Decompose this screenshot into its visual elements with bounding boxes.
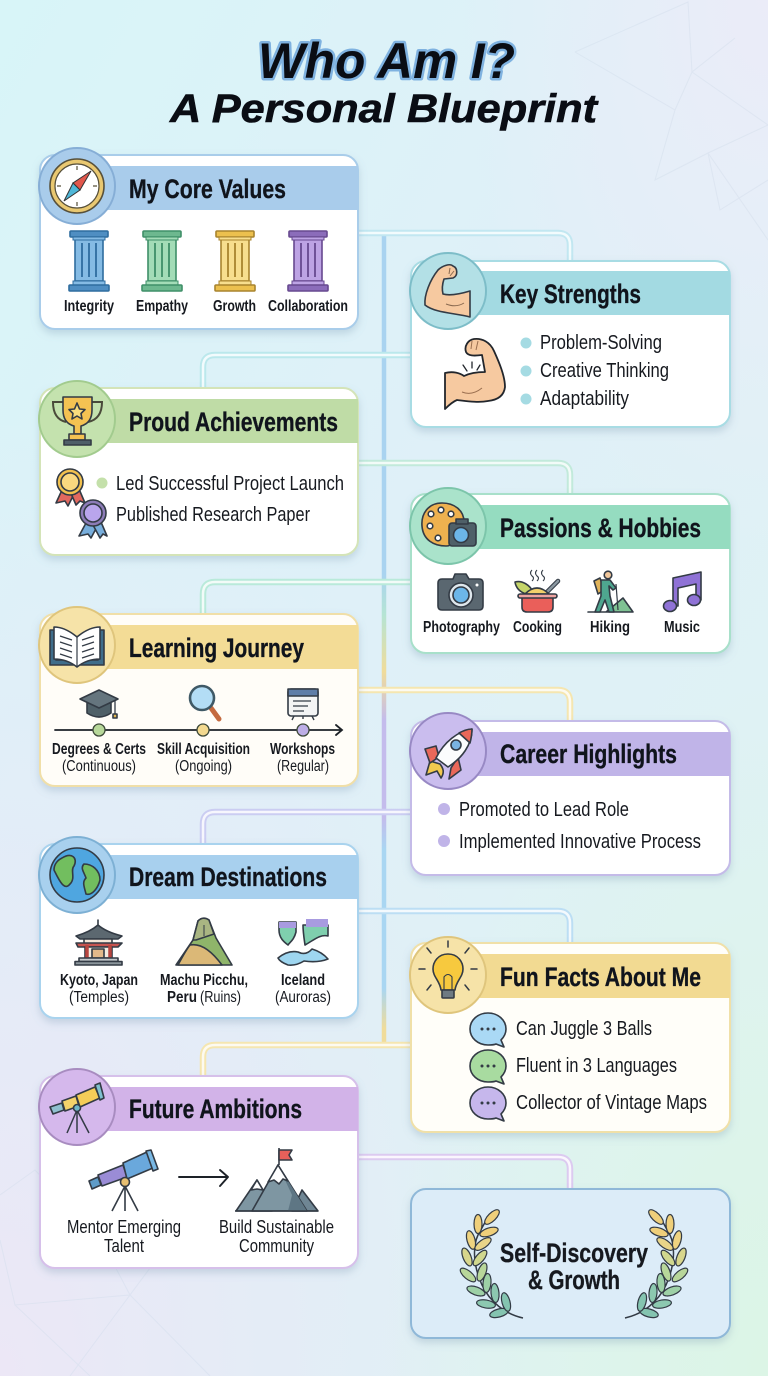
timeline labels: Skill Acquisition (157, 741, 250, 758)
timeline labels: Workshops (270, 741, 335, 758)
heading: Fun Facts About Me (500, 962, 701, 992)
icon: yellow pillar (215, 231, 255, 291)
icon: hiker (588, 571, 633, 612)
achievements list (96, 473, 344, 526)
value labels: Integrity (64, 298, 114, 315)
panel: dream destinations (39, 837, 358, 1018)
strengths list: Creative Thinking (540, 360, 669, 382)
destination labels: (Ruins) (200, 989, 241, 1006)
icon: bicep (445, 339, 505, 409)
heading: Passions & Hobbies (500, 513, 701, 543)
title (169, 33, 599, 131)
hobby labels: Photography (423, 619, 500, 636)
strengths list: Problem-Solving (540, 332, 662, 354)
icon: blue telescope (89, 1150, 158, 1211)
timeline labels: (Continuous) (62, 758, 136, 775)
career list: Implemented Innovative Process (459, 831, 701, 853)
panel: fun facts (410, 937, 730, 1132)
icon: cooking pot (515, 570, 558, 612)
timeline labels: (Regular) (277, 758, 329, 775)
connectors (203, 233, 570, 1190)
panel: career highlights (410, 713, 730, 875)
career list: Promoted to Lead Role (459, 799, 629, 821)
icon: camera (438, 574, 483, 610)
ambition labels: Community (239, 1236, 314, 1256)
heading: Learning Journey (129, 633, 304, 663)
icon: green pillar (142, 231, 182, 291)
facts list (516, 1018, 707, 1114)
facts list: Collector of Vintage Maps (516, 1092, 707, 1114)
closing message: & Growth (528, 1265, 620, 1295)
value labels: Collaboration (268, 298, 348, 315)
heading: Dream Destinations (129, 862, 327, 892)
destination labels: (Auroras) (275, 989, 331, 1006)
ambition labels (67, 1217, 334, 1256)
icon: palette and camera (410, 488, 486, 564)
ambition labels: Talent (104, 1236, 144, 1256)
timeline (55, 724, 342, 736)
hobby labels: Hiking (590, 619, 630, 636)
value labels (64, 298, 348, 315)
icon: right laurel (625, 1207, 690, 1319)
icon: medals (56, 469, 107, 538)
achievements list: Published Research Paper (116, 504, 310, 526)
icon: music note (664, 572, 701, 612)
closing message: Self-Discovery (500, 1238, 648, 1268)
panel: passions and hobbies (410, 488, 730, 653)
timeline labels: (Ongoing) (175, 758, 232, 775)
destination labels: Iceland (281, 972, 325, 989)
icon: kyoto temple (75, 920, 122, 965)
heading: My Core Values (129, 174, 286, 204)
icon: purple pillar (288, 231, 328, 291)
icon: light bulb (410, 937, 486, 1013)
destination labels: (Temples) (69, 989, 129, 1006)
icon: rocket (410, 713, 486, 789)
career list (438, 799, 701, 853)
icon: open book (39, 607, 115, 683)
value labels: Empathy (136, 298, 188, 315)
closing message (500, 1238, 648, 1295)
destination labels (60, 972, 331, 1006)
timeline labels: Degrees & Certs (52, 741, 146, 758)
destination labels: Peru (167, 989, 197, 1006)
panel: learning journey (39, 607, 358, 786)
icon: yellow telescope (39, 1069, 115, 1145)
strengths list (520, 332, 669, 410)
heading: Future Ambitions (129, 1094, 302, 1124)
heading: Key Strengths (500, 279, 641, 309)
arrow (179, 1170, 228, 1186)
icon: speech bubbles (470, 1013, 506, 1121)
icon: blue pillar (69, 231, 109, 291)
title: Who Am I? (258, 33, 515, 89)
value labels: Growth (213, 298, 256, 315)
ambition labels: Build Sustainable (219, 1217, 334, 1237)
achievements list: Led Successful Project Launch (116, 473, 344, 495)
panel: self-discovery (411, 1189, 730, 1338)
panel: future ambitions (39, 1069, 358, 1268)
panel: my core values (39, 148, 358, 329)
panel: key strengths (410, 253, 730, 427)
icon: workshop board (288, 689, 318, 720)
hobby labels (423, 619, 700, 636)
hobby labels: Cooking (513, 619, 562, 636)
heading: Proud Achievements (129, 407, 338, 437)
icon: flexed arm badge (410, 253, 486, 329)
strengths list: Adaptability (540, 388, 629, 410)
facts list: Can Juggle 3 Balls (516, 1018, 652, 1040)
icon: globe (39, 837, 115, 913)
icon: graduation cap (80, 690, 118, 718)
panel: proud achievements (39, 381, 358, 555)
destination labels: Kyoto, Japan (60, 972, 138, 989)
icon: mountain with flag (235, 1148, 318, 1211)
icon: machu picchu (176, 918, 232, 965)
heading: Career Highlights (500, 739, 677, 769)
icon: trophy (39, 381, 115, 457)
facts list: Fluent in 3 Languages (516, 1055, 677, 1077)
timeline labels (52, 741, 335, 775)
destination labels: Machu Picchu, (160, 972, 248, 989)
title: A Personal Blueprint (169, 87, 599, 131)
icon: left laurel (458, 1207, 523, 1319)
icon: magnifier (190, 686, 219, 719)
icon: iceland aurora (278, 919, 328, 965)
hobby labels: Music (664, 619, 700, 636)
ambition labels: Mentor Emerging (67, 1217, 181, 1237)
icon: compass (39, 148, 115, 224)
